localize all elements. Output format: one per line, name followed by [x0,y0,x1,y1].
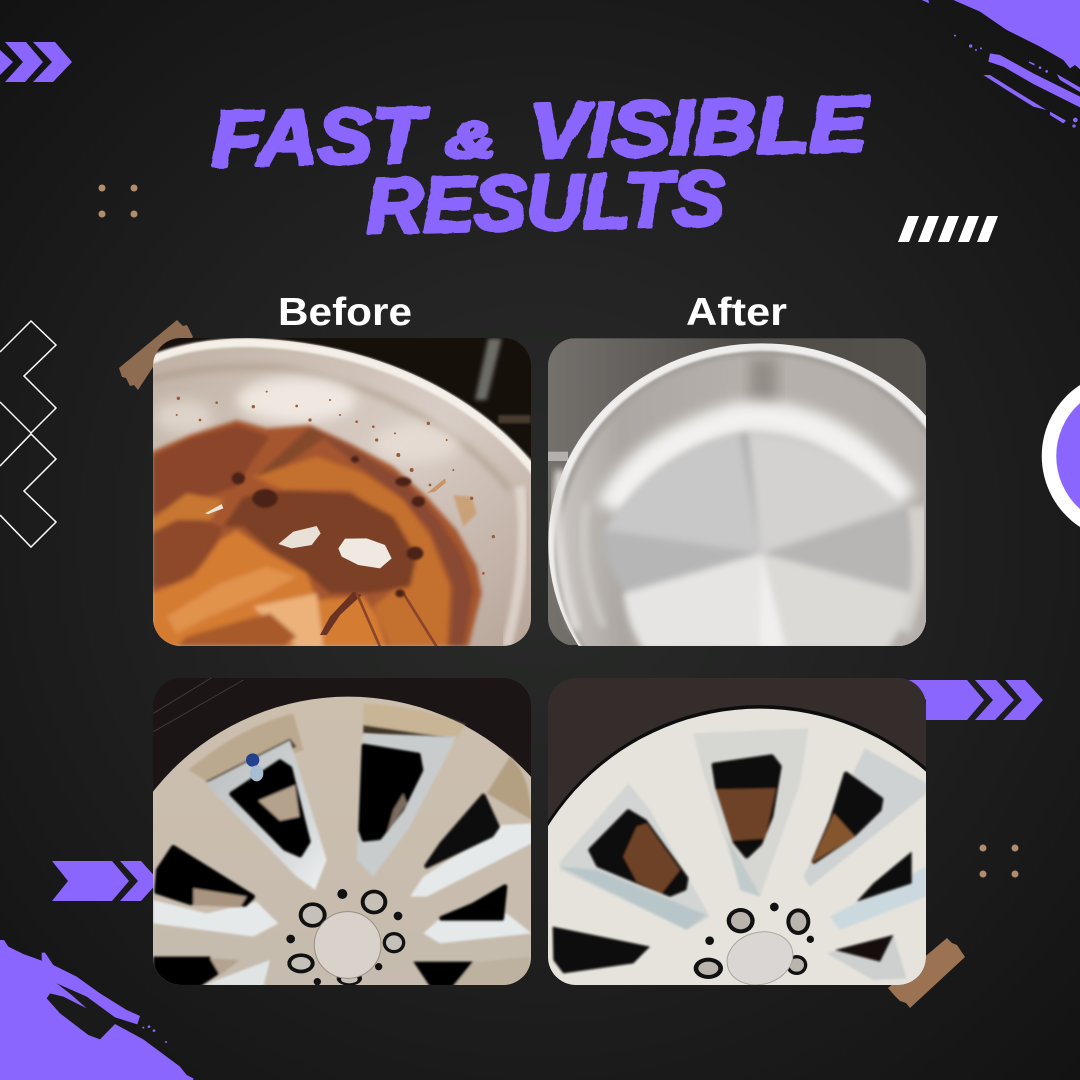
wheel hub [694,903,814,979]
decorative chevrons: lower left [52,861,159,901]
decorative dots: top left [98,184,138,218]
windows [153,746,530,987]
tape: top left [119,320,193,390]
photo: clean pan after [548,338,926,646]
decorative chevrons: right [908,680,1043,720]
wheel hub [286,889,405,986]
decorative chevrons: top left [0,42,72,82]
dark spots [232,456,425,597]
decorative circle: right [1042,385,1080,527]
wall reflections [750,358,777,415]
decorative zigzag outline: left [0,321,56,547]
tape: bottom right [888,938,965,1008]
bare patches [278,526,321,548]
silver inner walls [153,733,532,987]
rust layers [152,420,482,647]
decorative stripes: top right [898,216,998,242]
title: FAST [211,90,431,183]
photo: dirty wheel before [153,678,531,985]
blue valve cap [246,753,263,781]
photo: rusty pan before [150,338,535,647]
decorative dots: lower right [980,844,1018,878]
rim [548,343,926,646]
brush stroke: bottom left [0,940,193,1080]
photo: clean wheel after [548,678,926,985]
brush stroke: top right [922,0,1080,128]
title [211,79,870,250]
title: & [445,112,495,168]
title: VISIBLE [528,79,870,175]
title: RESULTS [365,154,725,250]
label: After: After [686,291,787,334]
dirty outer rim [188,703,532,820]
pan base wedges [603,433,911,650]
label: Before: Before [278,291,412,334]
windows [553,757,912,973]
silver inner walls [560,728,927,980]
speckles [176,391,495,575]
